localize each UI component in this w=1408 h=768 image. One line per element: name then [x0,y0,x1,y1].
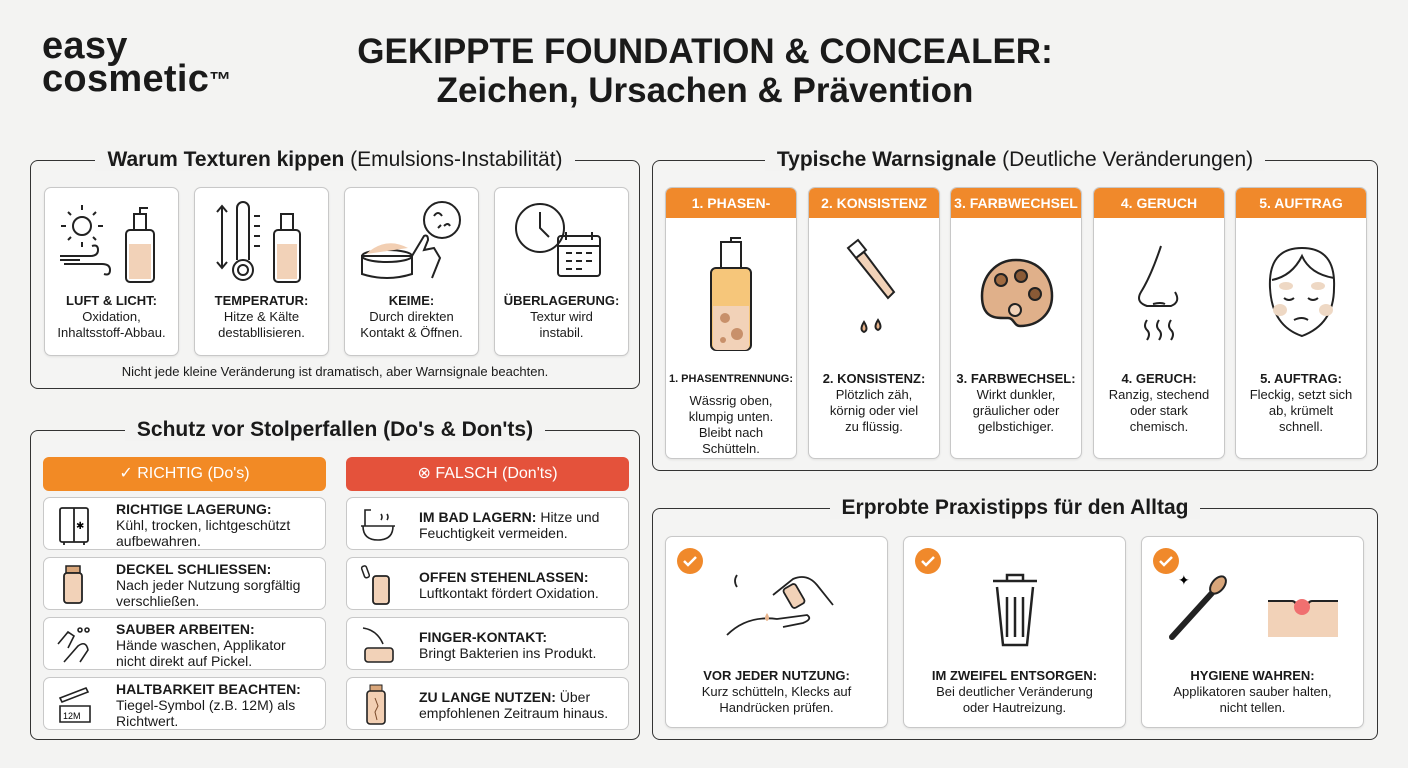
do: deckel: verschließen. [116,593,199,609]
tip 1: Kurz schütteln, Klecks auf [702,684,851,699]
dont: zu lange: ZU LANGE NUTZEN: Über [419,689,590,705]
sign 1: Bleibt nach [699,425,763,440]
tip 1 [665,536,888,728]
do: deckel: DECKEL SCHLIESSEN: [116,561,271,577]
sign 4: 4. GERUCH: [1121,371,1197,386]
card: keime: Durch direkten [369,309,454,324]
panel: causes [30,160,640,389]
sign 5 [1235,187,1367,459]
sign 2: 2. KONSISTENZ [821,195,927,211]
card: temperatur [194,187,329,356]
do: lagerung: RICHTIGE LAGERUNG: [116,501,272,517]
do: haltbarkeit: 12M [63,711,81,721]
do: deckel: Nach jeder Nutzung sorgfältig [116,577,300,593]
heading: do's and don'ts: Schutz vor Stolperfallen (Do's & Don'ts) [137,418,533,441]
logo [42,25,231,100]
card: temperatur: TEMPERATUR: [215,293,308,308]
dont: bad [346,497,629,550]
sign 1: klumpig unten. [689,409,773,424]
do: haltbarkeit: Tiegel-Symbol (z.B. 12M) als [116,697,295,713]
sign 4: chemisch. [1130,419,1188,434]
sign 2: zu flüssig. [845,419,903,434]
tip 3 [1141,536,1364,728]
tip 3: Applikatoren sauber halten, [1173,684,1332,699]
title [357,32,1053,110]
tip 2: oder Hautreizung. [963,700,1066,715]
sign 2: Plötzlich zäh, [836,387,912,402]
do: lagerung: aufbewahren. [116,533,201,549]
header: falsch [346,457,629,491]
dont: finger: Bringt Bakterien ins Produkt. [419,645,596,661]
card: luft & licht: LUFT & LICHT: [66,293,157,308]
heading: causes: Warum Texturen kippen (Emulsions-Instabilität) [107,148,563,171]
do: haltbarkeit [43,677,326,730]
do: haltbarkeit: Richtwert. [116,713,178,729]
card: überlagerung: Textur wird [530,309,593,324]
do: sauber [43,617,326,670]
card: keime: Kontakt & Öffnen. [360,325,463,340]
dont: finger: FINGER-KONTAKT: [419,629,547,645]
header: falsch: ⊗ FALSCH (Don'ts) [417,465,558,482]
do: lagerung: Kühl, trocken, lichtgeschützt [116,517,290,533]
tip 3: HYGIENE WAHREN: [1190,668,1315,683]
sign 3: gräulicher oder [973,403,1059,418]
do: lagerung [43,497,326,550]
sign 3: gelbstichiger. [978,419,1054,434]
dont: offen [346,557,629,610]
sign 3: 3. FARBWECHSEL: [956,371,1076,386]
dont: finger [346,617,629,670]
tip 3: ✦ [1178,572,1190,588]
sign 5: ab, krümelt [1269,403,1333,418]
panel: warnsignale [652,160,1378,471]
sign 5: 5. AUFTRAG: [1260,371,1342,386]
card: temperatur: Hitze & Kälte [224,309,299,324]
do: sauber: nicht direkt auf Pickel. [116,653,252,669]
sign 1: 1. PHASENTRENNUNG: [669,373,793,385]
sign 3 [950,187,1082,459]
do: lagerung: ✱ [76,521,84,532]
header: richtig: ✓︎ RICHTIG (Do's) [119,465,250,482]
sign 5: Fleckig, setzt sich [1250,387,1352,402]
dont: zu lange: empfohlenen Zeitraum hinaus. [419,705,608,721]
note: Nicht jede kleine Veränderung ist dramatisch, aber Warnsignale beachten. [122,364,548,379]
logo: easy [42,25,128,67]
do: sauber: Hände waschen, Applikator [116,637,286,653]
tip 2: IM ZWEIFEL ENTSORGEN: [932,668,1097,683]
card: überlagerung: instabil. [539,325,584,340]
do: sauber: SAUBER ARBEITEN: [116,621,255,637]
sign 1: Schütteln. [702,441,760,456]
sign 4: Ranzig, stechend [1109,387,1209,402]
tip 1: Handrücken prüfen. [719,700,834,715]
dont: bad: IM BAD LAGERN: Hitze und [419,509,599,525]
title: Zeichen, Ursachen & Prävention [437,71,973,110]
header: richtig [43,457,326,491]
sign 1: Wässrig oben, [689,393,773,408]
title: GEKIPPTE FOUNDATION & CONCEALER: [357,32,1053,71]
sign 4 [1093,187,1225,459]
sign 1 [665,187,797,459]
dont: zu lange [346,677,629,730]
heading: warnsignale: Typische Warnsignale (Deutliche Veränderungen) [777,148,1253,171]
tip 3: nicht tellen. [1220,700,1285,715]
sign 5: schnell. [1279,419,1323,434]
sign 2 [808,187,940,459]
sign 3: 3. FARBWECHSEL [954,195,1078,211]
sign 2: körnig oder viel [830,403,918,418]
do: deckel [43,557,326,610]
dont: offen: Luftkontakt fördert Oxidation. [419,585,599,601]
heading: praxistipps: Erprobte Praxistipps für den Alltag [842,496,1188,519]
dont: bad: Feuchtigkeit vermeiden. [419,525,568,541]
do: haltbarkeit: HALTBARKEIT BEACHTEN: [116,681,301,697]
sign 3: Wirkt dunkler, [977,387,1055,402]
dont: offen: OFFEN STEHENLASSEN: [419,569,589,585]
card: überlagerung [494,187,629,356]
card: keime: KEIME: [389,293,434,308]
logo: cosmetic™ [42,58,231,100]
sign 5: 5. AUFTRAG [1259,195,1343,211]
card: luft & licht: Inhaltsstoff-Abbau. [57,325,166,340]
sign 1: 1. PHASEN- [692,195,770,211]
card: luft & licht [44,187,179,356]
tip 1: VOR JEDER NUTZUNG: [703,668,850,683]
panel: praxistipps [652,508,1378,740]
card: temperatur: destabllisieren. [218,325,305,340]
sign 4: 4. GERUCH [1121,195,1197,211]
card: luft & licht: Oxidation, [82,309,141,324]
card: überlagerung: ÜBERLAGERUNG: [504,293,619,308]
panel: do's and don'ts [30,430,640,740]
sign 4: oder stark [1130,403,1188,418]
tip 2 [903,536,1126,728]
tip 2: Bei deutlicher Veränderung [936,684,1093,699]
card: keime [344,187,479,356]
sign 2: 2. KONSISTENZ: [823,371,925,386]
